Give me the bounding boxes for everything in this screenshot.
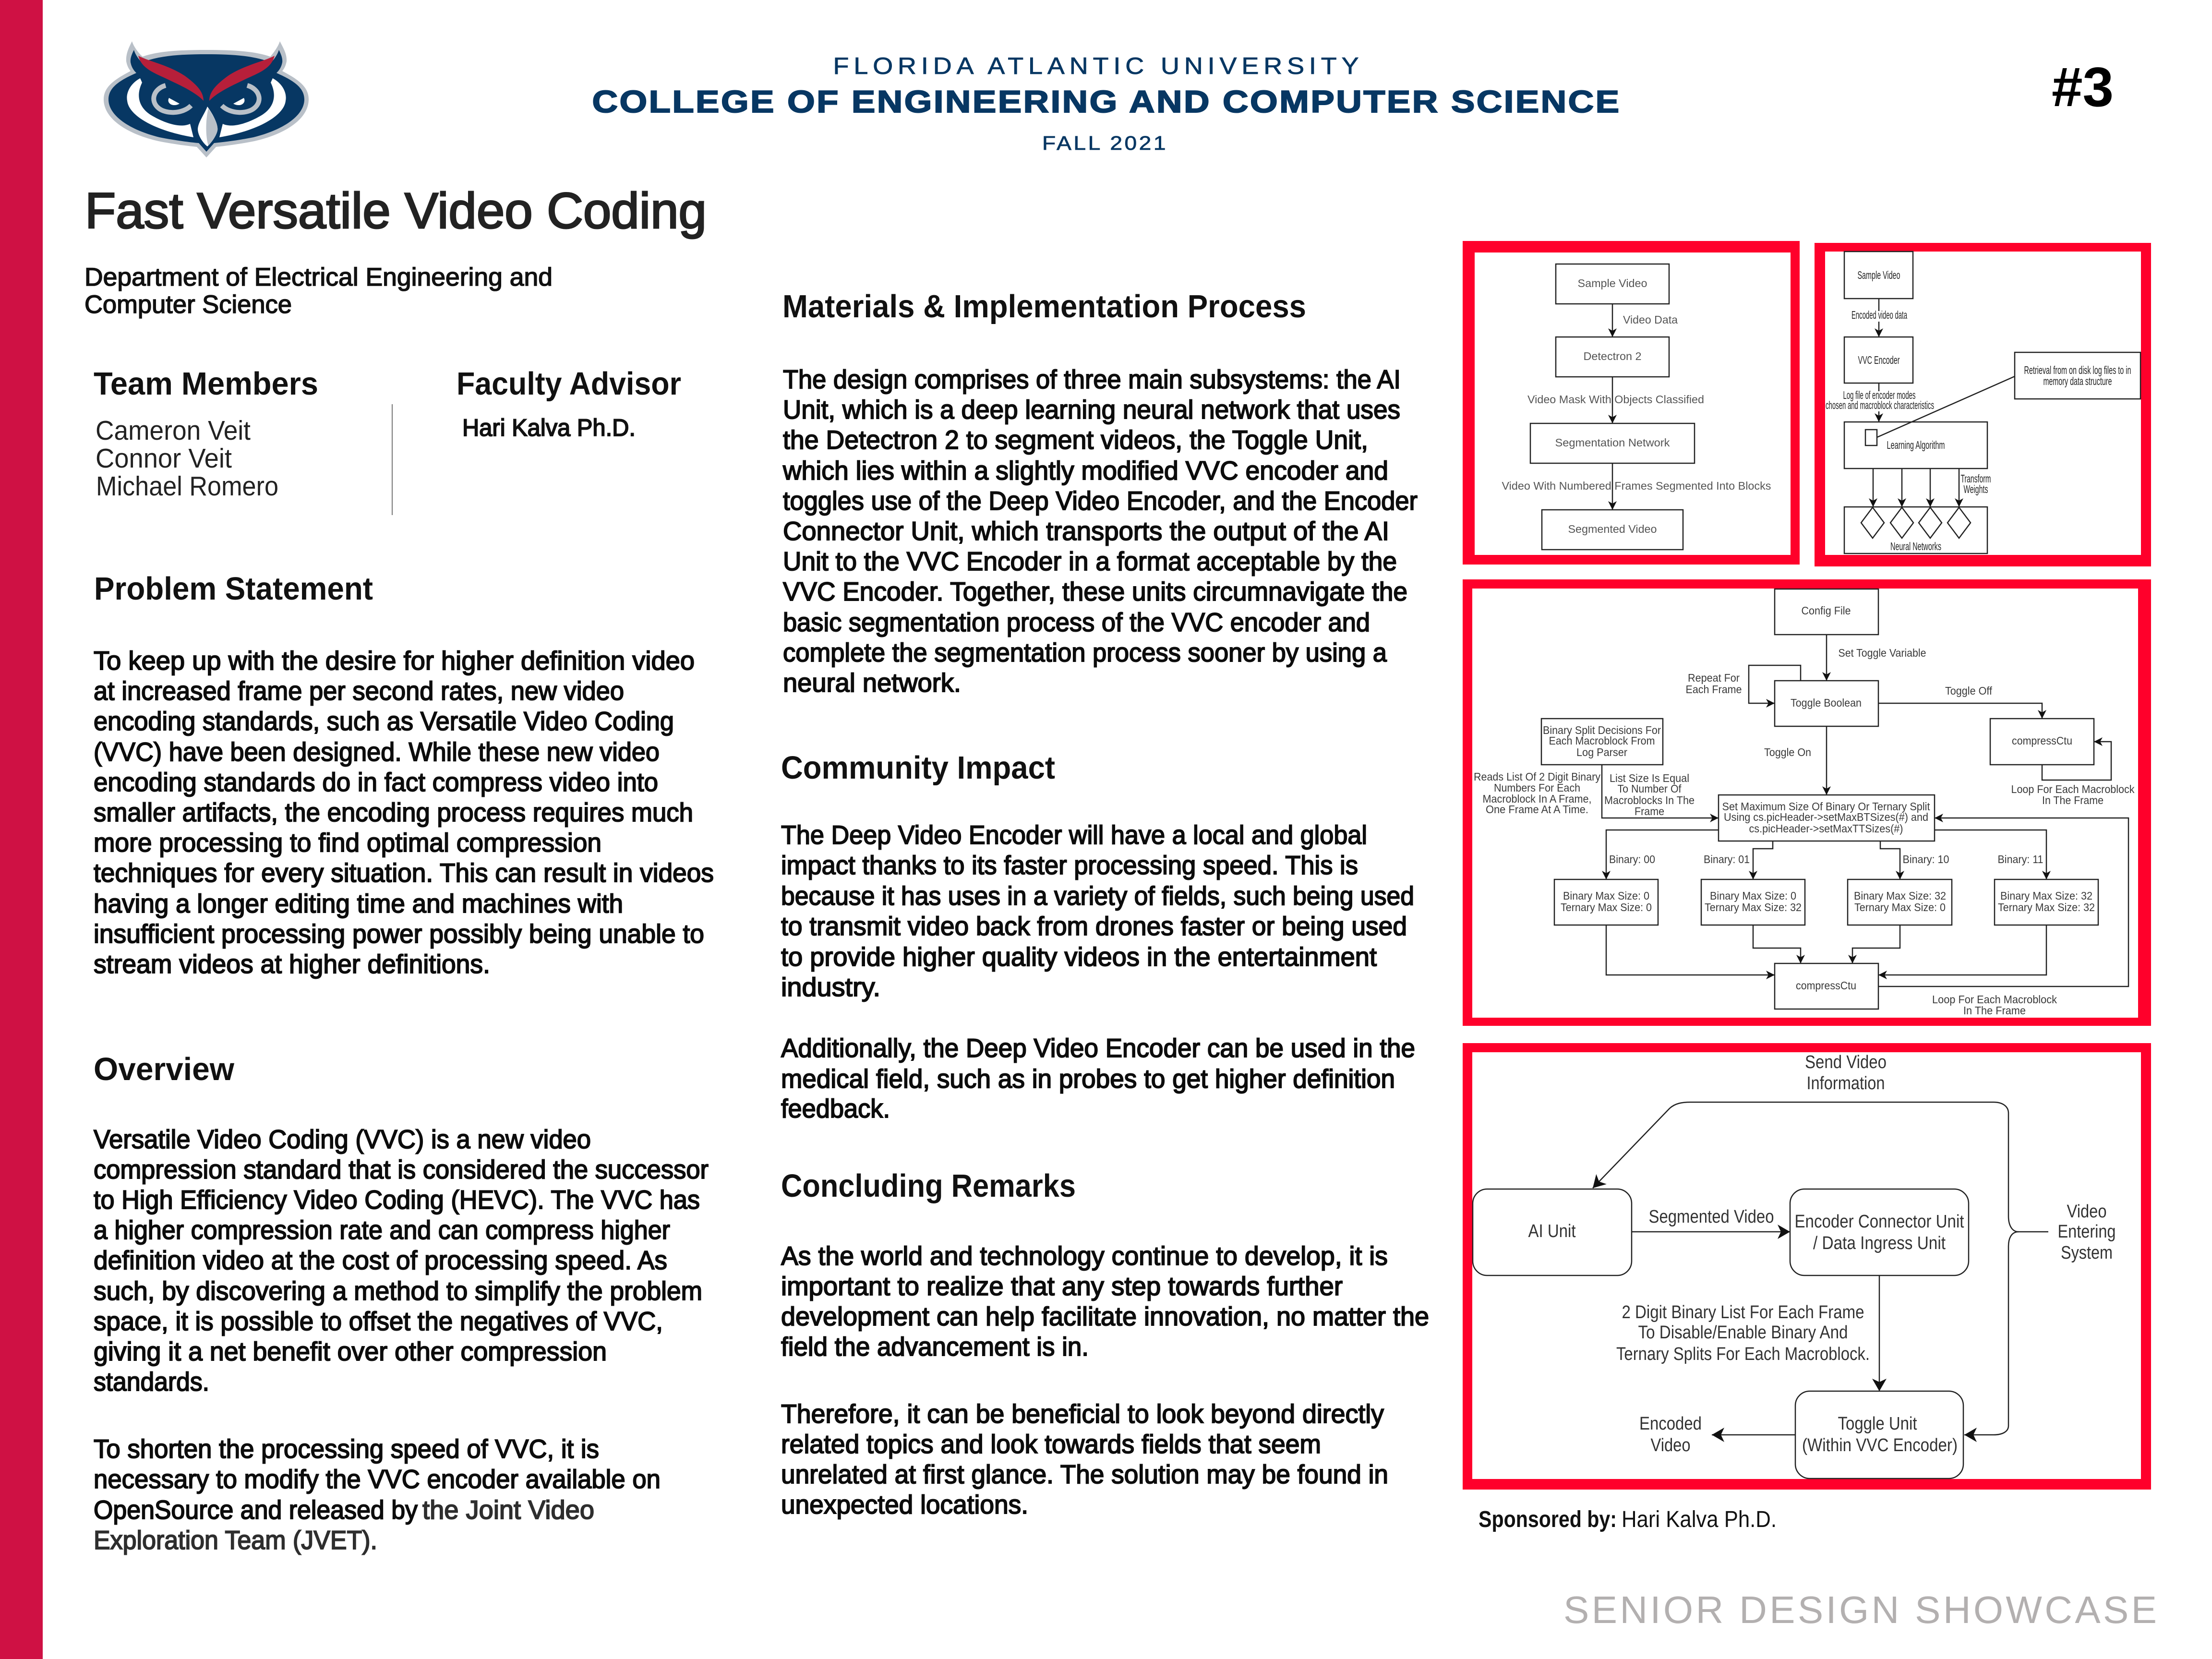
panel: segmentation flowchart (1463, 241, 1800, 565)
community impact: impact thanks to its faster processing speed. This is (781, 850, 1358, 880)
problem statement: encoding standards do in fact compress video into (94, 767, 658, 797)
panel: toggle logic flowchart: In The Frame (1963, 1004, 2026, 1017)
concluding remarks: As the world and technology continue to develop, it is (781, 1241, 1388, 1271)
panel: system overview flowchart: Video (2067, 1202, 2106, 1222)
overview: the Joint Video (422, 1495, 594, 1525)
materials and implementation process: Unit to the VVC Encoder in a format acceptable by the (783, 546, 1397, 576)
panel: toggle logic flowchart (1463, 579, 2151, 1026)
panel: segmentation flowchart: Detectron 2 (1583, 350, 1642, 362)
panel: system overview flowchart: Video (1650, 1435, 1691, 1455)
materials and implementation process: Connector Unit, which transports the output of the AI (783, 516, 1389, 546)
team members (94, 366, 318, 502)
poster number: #3 (2052, 56, 2114, 118)
panel: segmentation flowchart: Segmentation Network (1555, 436, 1670, 449)
panel: system overview flowchart: System (2061, 1243, 2113, 1263)
problem statement (94, 571, 714, 979)
overview: standards. (94, 1367, 209, 1396)
panel: toggle logic flowchart: One Frame At A Time. (1486, 803, 1588, 816)
panel: learning flowchart: Transform (1960, 472, 1991, 485)
panel: segmentation flowchart: Segmented Video (1568, 523, 1657, 535)
panel: learning flowchart: Sample Video (1858, 269, 1900, 281)
materials and implementation process: neural network. (783, 668, 961, 697)
materials and implementation process: The design comprises of three main subsystems: the AI (783, 364, 1401, 394)
panel: toggle logic flowchart: Ternary Max Size: 0 (1561, 901, 1652, 914)
community impact: industry. (781, 972, 880, 1002)
overview: to High Efficiency Video Coding (HEVC). The VVC has (94, 1185, 700, 1214)
panel: segmentation flowchart: Video Data (1623, 313, 1678, 326)
panel: toggle logic flowchart: cs.picHeader->setMaxTTSizes(#) (1749, 822, 1903, 835)
community impact: to transmit video back from drones faster or being used (781, 911, 1407, 941)
header: university and college (592, 53, 1621, 154)
panel: learning flowchart: Encoded video data (1851, 309, 1907, 321)
team members: Team Members (94, 366, 318, 402)
concluding remarks: unrelated at first glance. The solution may be found in (781, 1459, 1388, 1489)
community impact: The Deep Video Encoder will have a local and global (781, 820, 1367, 850)
panel: toggle logic flowchart: In The Frame (2042, 794, 2104, 806)
faculty advisor: Faculty Advisor (457, 366, 681, 402)
panel: toggle logic flowchart: Binary Max Size: 32 (2000, 890, 2092, 902)
materials and implementation process (782, 289, 1418, 697)
panel: system overview flowchart: AI Unit (1528, 1221, 1576, 1241)
panel: system overview flowchart: (Within VVC Encoder) (1802, 1435, 1958, 1455)
footer: senior design showcase: SENIOR DESIGN SHOWCASE (1563, 1588, 2157, 1631)
title: Fast Versatile Video Coding (85, 183, 707, 239)
concluding remarks: Therefore, it can be beneficial to look beyond directly (781, 1399, 1384, 1429)
overview: Overview (94, 1051, 235, 1087)
community impact: feedback. (781, 1094, 890, 1123)
panel: toggle logic flowchart: Set Maximum Size Of Binary Or Ternary Split (1722, 800, 1930, 813)
panel: toggle logic flowchart: Frame (1635, 805, 1664, 817)
community impact (781, 750, 1415, 1123)
panel: segmentation flowchart: Sample Video (1577, 277, 1647, 289)
panel: toggle logic flowchart: Binary: 01 (1704, 853, 1750, 866)
panel: learning flowchart: Weights (1963, 483, 1988, 495)
panel: system overview flowchart: Entering (2057, 1222, 2116, 1242)
department: Department of Electrical Engineering and (84, 263, 553, 291)
panel: system overview flowchart: To Disable/Enable Binary And (1638, 1322, 1848, 1343)
overview: giving it a net benefit over other compression (94, 1336, 607, 1366)
sponsor note: Sponsored by: (1479, 1507, 1617, 1532)
community impact: medical field, such as in probes to get higher definition (781, 1064, 1395, 1094)
overview: space, it is possible to offset the negatives of VVC, (94, 1306, 663, 1336)
panel: toggle logic flowchart: Macroblocks In The (1604, 794, 1695, 806)
panel: toggle logic flowchart: Binary Split Decisions For (1543, 724, 1661, 736)
panel: toggle logic flowchart: Loop For Each Macroblock (1932, 993, 2057, 1006)
panel: segmentation flowchart: Video With Numbered Frames Segmented Into Blocks (1502, 480, 1771, 492)
community impact: because it has uses in a variety of fields, such being used (781, 881, 1414, 911)
icon: FAU owl logo (104, 41, 309, 157)
concluding remarks: related topics and look towards fields that seem (781, 1429, 1321, 1459)
problem statement: at increased frame per second rates, new video (94, 676, 624, 706)
panel: toggle logic flowchart: Macroblock In A Frame, (1482, 793, 1592, 805)
panel: toggle logic flowchart: Ternary Max Size: 32 (1998, 901, 2095, 914)
materials and implementation process: the Detectron 2 to segment videos, the Toggle Unit, (783, 425, 1368, 455)
panel: toggle logic flowchart: List Size Is Equal (1610, 772, 1689, 784)
left accent band (0, 0, 43, 1659)
problem statement: techniques for every situation. This can result in videos (94, 858, 714, 888)
materials and implementation process: toggles use of the Deep Video Encoder, and the Encoder (783, 486, 1418, 516)
panel: toggle logic flowchart: Loop For Each Macroblock (2011, 783, 2135, 795)
panel: system overview flowchart: Encoded (1639, 1414, 1702, 1434)
team members: Connor Veit (96, 443, 232, 474)
materials and implementation process: VVC Encoder. Together, these units circumnavigate the (783, 577, 1407, 606)
concluding remarks: unexpected locations. (781, 1490, 1028, 1519)
panel: learning flowchart: Log file of encoder modes (1843, 389, 1915, 401)
panel: toggle logic flowchart: To Number Of (1618, 782, 1682, 795)
panel: toggle logic flowchart: compressCtu (1796, 979, 1856, 992)
panel: learning flowchart: chosen and macroblock characteristics (1826, 399, 1934, 411)
panel: system overview flowchart: Information (1807, 1073, 1885, 1094)
panel: toggle logic flowchart: compressCtu (2012, 734, 2072, 747)
panel: toggle logic flowchart: Binary Max Size: 0 (1563, 890, 1649, 902)
materials and implementation process: complete the segmentation process sooner by using a (783, 637, 1387, 667)
overview: Versatile Video Coding (VVC) is a new video (94, 1124, 591, 1154)
panel: toggle logic flowchart: Log Parser (1576, 746, 1627, 758)
concluding remarks: important to realize that any step towards further (781, 1271, 1343, 1301)
panel: system overview flowchart: Send Video (1805, 1052, 1887, 1072)
problem statement: (VVC) have been designed. While these new video (94, 737, 660, 767)
materials and implementation process: basic segmentation process of the VVC encoder and (783, 607, 1370, 637)
header: university and college: FALL 2021 (1042, 132, 1168, 154)
panel: learning flowchart: Learning Algorithm (1887, 439, 1945, 451)
panel: toggle logic flowchart: Ternary Max Size: 0 (1854, 901, 1946, 914)
header: university and college: COLLEGE OF ENGINEERING AND COMPUTER SCIENCE (592, 84, 1621, 119)
panel: toggle logic flowchart: Binary Max Size: 32 (1854, 890, 1946, 902)
problem statement: more processing to find optimal compression (94, 828, 601, 857)
community impact: Community Impact (781, 750, 1055, 786)
panel: toggle logic flowchart: Using cs.picHeader->setMaxBTSizes(#) and (1724, 811, 1928, 823)
header: university and college: FLORIDA ATLANTIC UNIVERSITY (833, 53, 1363, 79)
concluding remarks: field the advancement is in. (781, 1332, 1089, 1361)
panel: learning flowchart: Retrieval from on disk log files to in (2024, 364, 2131, 376)
panel: learning flowchart: VVC Encoder (1858, 354, 1900, 366)
concluding remarks: development can help facilitate innovation, no matter the (781, 1301, 1429, 1331)
problem statement: stream videos at higher definitions. (94, 949, 490, 979)
overview (94, 1051, 709, 1555)
panel: toggle logic flowchart: Binary: 10 (1903, 853, 1949, 866)
concluding remarks: Concluding Remarks (781, 1168, 1076, 1204)
overview: a higher compression rate and can compress higher (94, 1215, 670, 1245)
panel: segmentation flowchart: Video Mask With Objects Classified (1527, 393, 1704, 406)
overview: such, by discovering a method to simplify the problem (94, 1276, 702, 1306)
overview: Exploration Team (JVET). (94, 1525, 377, 1555)
panel: toggle logic flowchart: Repeat For (1688, 672, 1740, 684)
panel: toggle logic flowchart: Binary: 00 (1609, 853, 1655, 866)
concluding remarks (781, 1168, 1429, 1519)
panel: toggle logic flowchart: Binary: 11 (1998, 853, 2043, 866)
sponsor note: Hari Kalva Ph.D. (1622, 1507, 1777, 1532)
overview: necessary to modify the VVC encoder available on (94, 1464, 661, 1494)
team members: Cameron Veit (96, 415, 251, 446)
overview: OpenSource and released by (94, 1495, 418, 1525)
problem statement: smaller artifacts, the encoding process requires much (94, 797, 693, 827)
panel: system overview flowchart: 2 Digit Binary List For Each Frame (1622, 1302, 1864, 1322)
panel: toggle logic flowchart: Numbers For Each (1494, 781, 1580, 794)
panel: toggle logic flowchart: Reads List Of 2 Digit Binary (1474, 770, 1600, 783)
department: Computer Science (84, 290, 292, 319)
faculty advisor: Hari Kalva Ph.D. (462, 414, 636, 441)
panel: learning flowchart: Neural Networks (1890, 540, 1941, 553)
panel: system overview flowchart: Ternary Splits For Each Macroblock. (1616, 1344, 1870, 1364)
materials and implementation process: which lies within a slightly modified VVC encoder and (782, 456, 1388, 485)
overview: compression standard that is considered the successor (94, 1154, 709, 1184)
overview: To shorten the processing speed of VVC, it is (94, 1434, 599, 1464)
problem statement: insufficient processing power possibly being unable to (94, 919, 704, 949)
community impact: to provide higher quality videos in the entertainment (781, 942, 1377, 972)
materials and implementation process: Materials & Implementation Process (782, 289, 1306, 325)
faculty advisor (457, 366, 681, 441)
panel: system overview flowchart (1463, 1043, 2151, 1490)
problem statement: having a longer editing time and machines with (94, 889, 623, 918)
panel: learning flowchart: memory data structure (2043, 375, 2112, 387)
panel: toggle logic flowchart: Config File (1801, 604, 1851, 617)
problem statement: encoding standards, such as Versatile Video Coding (94, 706, 674, 736)
panel: toggle logic flowchart: Ternary Max Size: 32 (1705, 901, 1802, 914)
materials and implementation process: Unit, which is a deep learning neural network that uses (783, 395, 1400, 424)
panel: toggle logic flowchart: Binary Max Size: 0 (1710, 890, 1796, 902)
problem statement: To keep up with the desire for higher definition video (94, 646, 695, 675)
panel: toggle logic flowchart: Toggle Off (1945, 685, 1993, 697)
community impact: Additionally, the Deep Video Encoder can be used in the (781, 1033, 1415, 1063)
panel: toggle logic flowchart: Toggle On (1764, 746, 1811, 758)
panel: system overview flowchart: Toggle Unit (1838, 1414, 1917, 1434)
panel: toggle logic flowchart: Set Toggle Variable (1839, 647, 1926, 659)
team members: Michael Romero (96, 471, 278, 502)
panel: toggle logic flowchart: Each Macroblock From (1549, 734, 1655, 747)
department (84, 263, 553, 319)
panel: system overview flowchart: Encoder Connector Unit (1794, 1212, 1964, 1232)
panel: system overview flowchart: / Data Ingress Unit (1813, 1233, 1946, 1253)
problem statement: Problem Statement (94, 571, 373, 607)
panel: system overview flowchart: Segmented Video (1648, 1207, 1774, 1227)
sponsor note (1479, 1507, 1777, 1532)
overview: definition video at the cost of processing speed. As (94, 1245, 667, 1275)
panel: learning flowchart (1815, 243, 2151, 566)
panel: toggle logic flowchart: Toggle Boolean (1791, 697, 1862, 709)
panel: toggle logic flowchart: Each Frame (1686, 683, 1742, 696)
